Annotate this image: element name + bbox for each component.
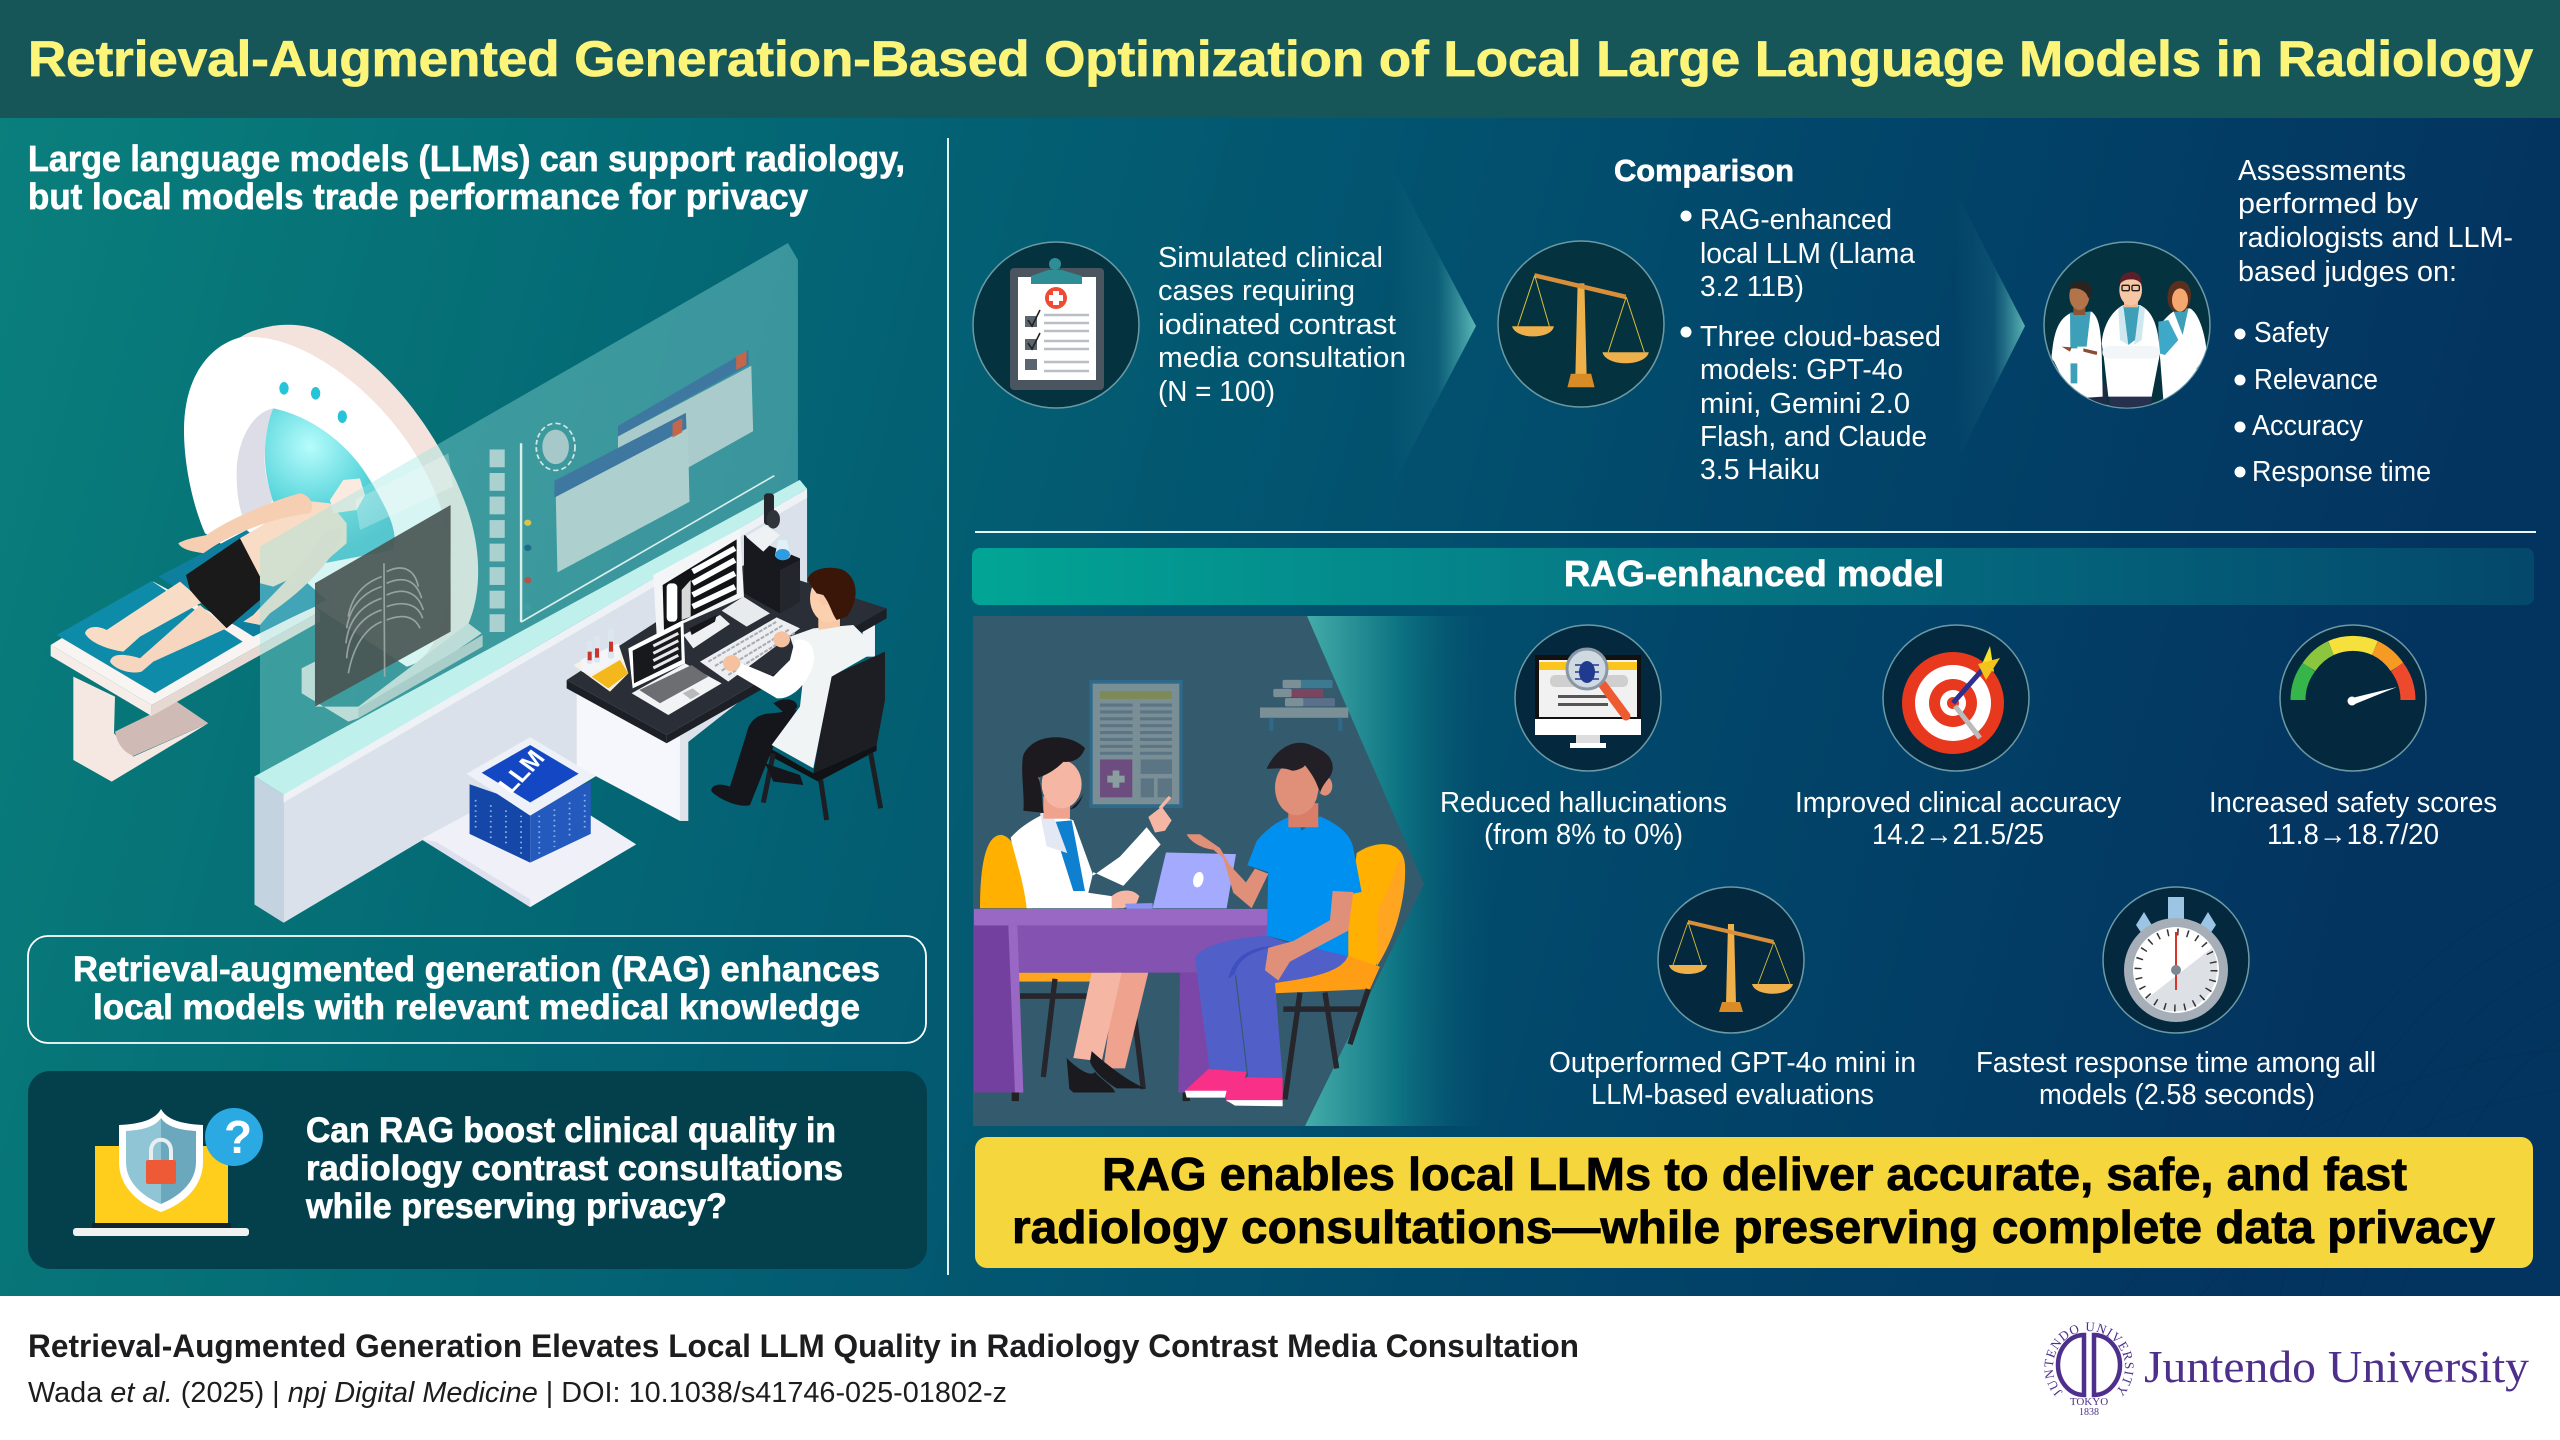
doctor hands (723, 631, 790, 671)
university seal: 1838 (2079, 1407, 2099, 1418)
callout: RAG enhances local models: Retrieval-augmented generation (RAG) enhances (73, 950, 880, 989)
front window (554, 413, 690, 572)
illustration: CT scanner with patient (51, 243, 798, 782)
text: comparison: models: GPT-4o (1700, 354, 1903, 386)
text: increased safety scores: Increased safety scores (2209, 787, 2497, 819)
desk leg (577, 623, 875, 821)
on-screen sidebar tiles (490, 449, 505, 632)
text: simulated cases: iodinated contrast (1158, 309, 1396, 341)
conclusion box: radiology consultations—while preserving complete data privacy (1012, 1201, 2495, 1253)
text: assessments: performed by (2238, 188, 2419, 220)
text: simulated cases: (N = 100) (1158, 376, 1275, 408)
back window (618, 350, 753, 507)
icon: laptop with shield (73, 1108, 263, 1236)
left doctor (2052, 281, 2107, 407)
citation: Retrieval-Augmented Generation Elevates Local LLM Quality in Radiology Contrast Media Consultation (28, 1328, 1579, 1364)
callout: RAG enhances local models (28, 936, 926, 1043)
text: assessments: Assessments (2238, 155, 2406, 187)
text: simulated cases: Simulated clinical (1158, 242, 1383, 274)
wall poster (1089, 680, 1183, 808)
text: comparison: local LLM (Llama (1700, 238, 1916, 270)
text: simulated cases: cases requiring (1158, 275, 1355, 307)
text: outperformed GPT-4o: LLM-based evaluations (1591, 1079, 1874, 1111)
illustration: doctor workstation (567, 493, 887, 821)
question text (305, 1111, 843, 1226)
gradient chevron behind consultation scene (1300, 616, 1490, 1126)
left heading (28, 138, 905, 217)
text: assessments: Response time (2252, 456, 2431, 488)
illustration: LLM server cube: LLM (493, 745, 551, 798)
question text: Can RAG boost clinical quality in (306, 1111, 836, 1150)
laptop (628, 620, 722, 715)
text: improved clinical accuracy: Improved clinical accuracy (1795, 787, 2121, 819)
test tubes and folder (573, 629, 628, 692)
doctor trousers (711, 699, 803, 806)
text: improved clinical accuracy: 14.2→21.5/25 (1872, 819, 2044, 851)
doctor chair (763, 652, 885, 820)
screen rule and dots (521, 443, 774, 622)
text: assessments: Safety (2254, 317, 2329, 349)
citation (28, 1328, 1579, 1409)
centre doctor (2102, 272, 2160, 410)
text: outperformed GPT-4o: Outperformed GPT-4o mini in (1549, 1047, 1916, 1079)
patient chair (1273, 844, 1405, 1099)
doctor legs (1067, 973, 1148, 1092)
text: fastest response time (1976, 1047, 2376, 1111)
text: comparison: 3.5 Haiku (1700, 454, 1820, 486)
university seal: JUNTENDO UNIVERSITY (2044, 1322, 2134, 1396)
citation: Wada et al. (2025) | npj Digital Medicine | DOI: 10.1038/s41746-025-01802-z (28, 1377, 1007, 1409)
footer background (0, 1296, 2560, 1440)
arrow: comparison to assessments (1955, 190, 2025, 465)
patient trousers (1195, 936, 1348, 1078)
left heading: but local models trade performance for privacy (28, 176, 808, 217)
scanner cradle (302, 623, 483, 722)
text: reduced hallucinations: Reduced hallucinations (1440, 787, 1727, 819)
desk (567, 563, 887, 743)
scanner table (51, 530, 327, 716)
patient (85, 478, 365, 673)
brain scan icon (536, 423, 575, 470)
patient shoes (1185, 1069, 1283, 1106)
text: comparison: Comparison (1614, 153, 1794, 188)
question text: radiology contrast consultations (306, 1149, 843, 1188)
university seal: TOKYO (2070, 1396, 2108, 1408)
icon: radiologists (2044, 242, 2210, 410)
left heading: Large language models (LLMs) can support radiology, (28, 138, 905, 179)
panel: research question (28, 1071, 927, 1269)
icon: safety gauge (2280, 625, 2426, 771)
Juntendo University logo (2044, 1322, 2529, 1418)
conclusion box: RAG enables local LLMs to deliver accurate, safe, and fast (1102, 1148, 2407, 1200)
text: assessments: based judges on: (2238, 256, 2457, 288)
text: assessments: Accuracy (2252, 410, 2363, 442)
text: increased safety scores (2209, 787, 2497, 851)
illustration: LLM server cube (421, 737, 636, 907)
text: outperformed GPT-4o (1549, 1047, 1916, 1111)
text: assessments (2234, 155, 2513, 488)
panel: consultation scene (973, 616, 1424, 1126)
arrow: cases to comparison (1390, 163, 1476, 490)
text: comparison: Flash, and Claude (1700, 421, 1927, 453)
text: fastest response time: Fastest response time among all (1976, 1047, 2376, 1079)
text: improved clinical accuracy (1795, 787, 2121, 851)
partition wall (254, 480, 807, 923)
text: assessments: Relevance (2254, 364, 2378, 396)
small keypad (722, 597, 770, 627)
text: comparison: mini, Gemini 2.0 (1700, 388, 1910, 420)
right doctor (2158, 281, 2207, 400)
laptop (1125, 852, 1236, 909)
callout: RAG enhances local models: local models with relevant medical knowledge (93, 988, 860, 1027)
keyboard (700, 617, 800, 682)
background wave lines (2120, 880, 2560, 1296)
icon: laptop with shield: ? (224, 1111, 252, 1163)
text: comparison: 3.2 11B) (1700, 271, 1804, 303)
title: Retrieval-Augmented Generation-Based Optimization of Local Large Language Models in Radiology (28, 31, 2533, 87)
text: reduced hallucinations (1440, 787, 1727, 851)
monitor (653, 528, 744, 648)
banner: RAG-enhanced model (972, 548, 2534, 605)
title bar (0, 0, 2560, 118)
illustration: doctor and patient consultation (974, 680, 1405, 1106)
vertical divider (947, 138, 949, 1275)
banner: RAG-enhanced model: RAG-enhanced model (1564, 553, 1944, 594)
text: simulated cases: media consultation (1158, 342, 1406, 374)
table (974, 909, 1271, 1101)
doctor coat (735, 625, 867, 768)
table pedestal (73, 677, 208, 782)
text: simulated cases (1158, 242, 1406, 408)
doctor torso and coat (1011, 797, 1172, 908)
patient shirt and arms (1187, 815, 1362, 981)
PC tower and microscope (744, 493, 800, 613)
x-ray film (315, 505, 451, 707)
text: comparison: RAG-enhanced (1700, 204, 1892, 236)
shelf with books (1260, 680, 1348, 731)
doctor head (1022, 737, 1085, 819)
conclusion box (975, 1137, 2533, 1268)
icon: balance scale small (1658, 887, 1804, 1033)
icon: clipboard (973, 242, 1139, 408)
icon: balance scale (1498, 241, 1664, 407)
doctor head (807, 568, 856, 630)
scanner ring (184, 325, 478, 667)
glass display panel (260, 243, 798, 773)
icon: stopwatch (2103, 887, 2249, 1033)
section divider (975, 531, 2536, 533)
patient head (1267, 743, 1333, 827)
glass highlight band (355, 453, 453, 530)
university name: Juntendo University (2144, 1341, 2529, 1392)
text: reduced hallucinations: (from 8% to 0%) (1484, 819, 1683, 851)
text: comparison: Three cloud-based (1700, 321, 1941, 353)
question text: while preserving privacy? (305, 1187, 727, 1226)
illustration: glass screen, wall and LLM (254, 350, 807, 923)
text: assessments: radiologists and LLM- (2238, 222, 2513, 254)
text: comparison (1614, 153, 1941, 486)
icon: bug on monitor (1515, 625, 1661, 771)
doctor chair (980, 835, 1143, 1089)
icon: target (1883, 625, 2029, 771)
text: increased safety scores: 11.8→18.7/20 (2267, 819, 2439, 851)
text: fastest response time: models (2.58 seconds) (2039, 1079, 2315, 1111)
